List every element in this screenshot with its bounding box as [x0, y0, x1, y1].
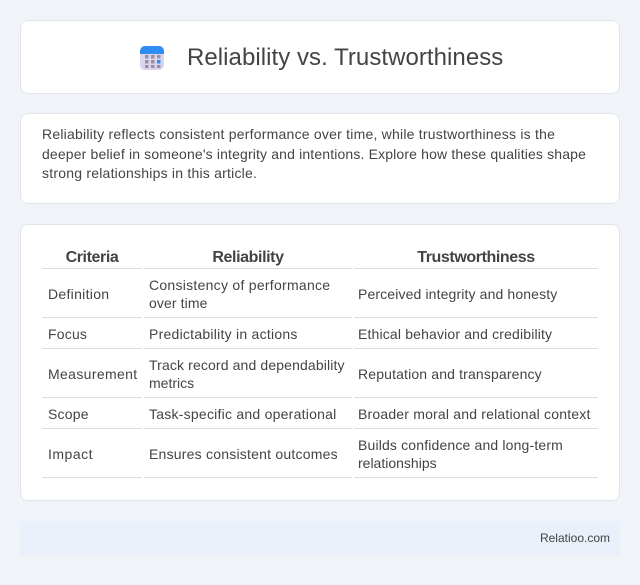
- footer: [20, 521, 620, 555]
- row: Scope: Broader moral and relational context: [358, 406, 591, 422]
- panel: title card: [20, 20, 620, 94]
- row: Focus: Focus: [48, 326, 87, 342]
- row: Focus: Ethical behavior and credibility: [358, 326, 552, 342]
- row: Scope: Scope: [48, 406, 89, 422]
- table header: [66, 249, 535, 266]
- row: Measurement: [48, 357, 542, 391]
- row: Definition: [48, 277, 558, 311]
- row: Scope: [48, 406, 591, 422]
- panel: introduction: [20, 113, 620, 204]
- row: Focus: Predictability in actions: [149, 326, 298, 342]
- row: Impact: Ensures consistent outcomes: [149, 446, 338, 462]
- table header: Trustworthiness: [417, 249, 535, 266]
- row: Definition: Perceived integrity and honesty: [358, 286, 557, 302]
- row: Impact: relationships: [358, 455, 437, 471]
- row: Measurement: metrics: [149, 375, 194, 391]
- row: Measurement: Measurement: [48, 366, 138, 382]
- title: Reliability vs. Trustworthiness: [187, 44, 503, 71]
- row: Definition: Definition: [48, 286, 109, 302]
- icon: calendar: [140, 46, 164, 70]
- table header: Criteria: [66, 249, 118, 266]
- row: Measurement: Reputation and transparency: [358, 366, 542, 382]
- intro text: Reliability reflects consistent performance over time, while trustworthiness is the: [42, 126, 555, 142]
- row: Impact: Impact: [48, 446, 93, 462]
- row: Scope: Task-specific and operational: [149, 406, 337, 422]
- row: Impact: Builds confidence and long-term: [358, 437, 563, 453]
- row: Definition: over time: [149, 295, 207, 311]
- intro text: strong relationships in this article.: [42, 165, 257, 181]
- row: Measurement: Track record and dependability: [149, 357, 345, 373]
- row: Focus: [48, 326, 552, 342]
- row: Impact: [48, 437, 563, 471]
- footer brand: Relatioo.com: [540, 531, 610, 545]
- table header: Reliability: [212, 249, 284, 266]
- panel: comparison table: [20, 224, 620, 501]
- row: Definition: Consistency of performance: [149, 277, 330, 293]
- intro text: deeper belief in someone's integrity and intentions. Explore how these qualities shape: [42, 146, 586, 162]
- intro text: [42, 126, 586, 181]
